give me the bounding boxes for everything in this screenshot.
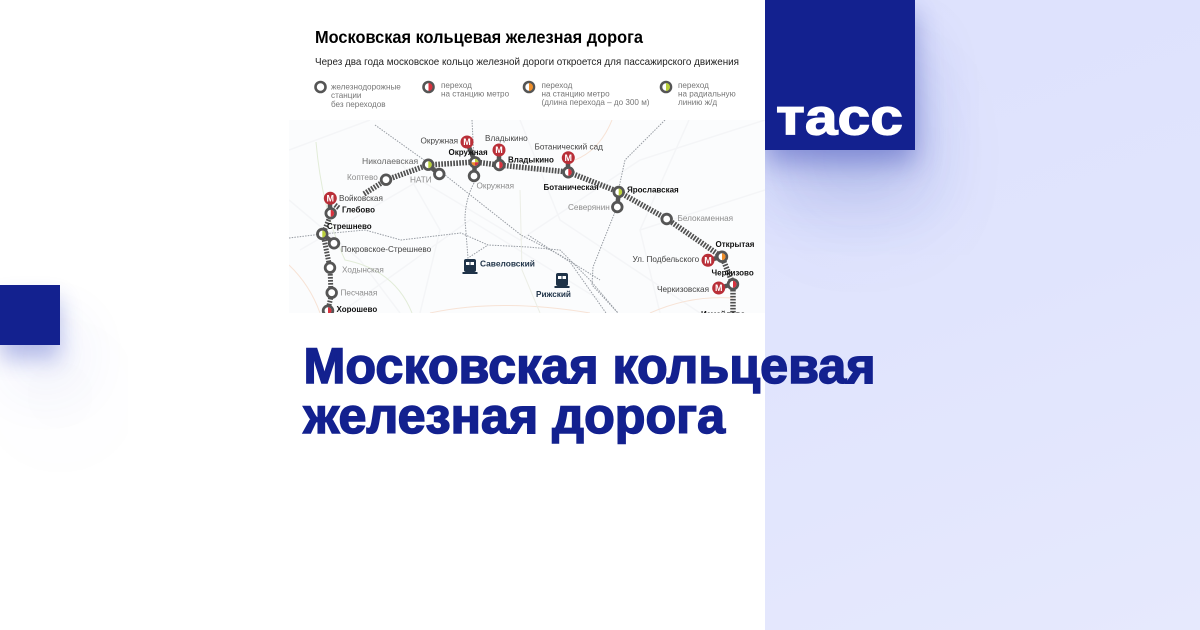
metro badges: М (495, 145, 503, 155)
station: Botanicheskaya (564, 168, 573, 177)
transfer connectors (322, 142, 733, 288)
plain station names: Песчаная (340, 288, 377, 298)
radial railways (289, 120, 665, 313)
transfer station names (bold): Открытая (716, 240, 755, 249)
transfer station names (bold): Окружная (448, 148, 488, 157)
decorative square with shadow (0, 285, 60, 345)
rail terminal: Savelovsky (462, 258, 535, 274)
plain stations (325, 169, 672, 298)
plain station names: Коптево (347, 173, 378, 182)
rail terminal: Savelovsky: Савеловский (480, 258, 535, 268)
metro station names: Черкизовская (657, 285, 709, 294)
transfer station names (bold): Ботаническая (544, 183, 599, 192)
station: Streshnevo (318, 229, 327, 239)
transfer station names (bold): Стрешнево (327, 222, 372, 231)
transfer station names (bold): Черкизово (712, 268, 754, 278)
legend item: metro transfer up to 300 m: (длина перехода – до 300 м) (542, 98, 650, 107)
rail terminal: Rizhsky (536, 273, 570, 297)
transfer station names (bold): Хорошево (336, 305, 377, 314)
station: Nikolaevskaya (424, 160, 433, 170)
metro station names: Ботанический сад (534, 142, 603, 152)
station: Otkrytaya (717, 252, 727, 262)
legend item: stations without transfers: без переходов (331, 100, 386, 109)
station: Vladykino (494, 160, 504, 170)
plain station names: Покровское-Стрешнево (341, 245, 432, 254)
legend item: metro transfer: на станцию метро (441, 90, 510, 98)
metro badges: М (715, 283, 722, 293)
transfer station names (bold): Ярославская (627, 186, 679, 194)
transfer station names (bold) (327, 148, 755, 319)
metro station names (339, 134, 709, 294)
metro station names: Войковская (339, 194, 383, 203)
legend item: metro transfer: переход (441, 81, 472, 90)
plain station names: Николаевская (362, 156, 419, 166)
infographic heading: Московская кольцевая железная дорога (315, 27, 643, 47)
station: Glebovo (326, 208, 336, 218)
legend item: radial rail transfer: на радиальную (678, 90, 736, 98)
main headline (302, 338, 876, 444)
legend item: stations without transfers: станции (331, 91, 361, 100)
metro badges: М (704, 256, 712, 266)
legend item: radial rail transfer: линию ж/д (678, 98, 717, 107)
plain station names: НАТИ (410, 176, 432, 184)
transfer station names (bold): Измайлово (701, 310, 745, 319)
infographic subtitle: Через два года московское кольцо железной дороги откроется для пассажирского движения (315, 56, 739, 68)
station: Cherkizovo (728, 280, 738, 289)
legend item: stations without transfers: железнодорожные (331, 82, 401, 92)
metro badges: М (327, 194, 334, 204)
metro badges (324, 136, 725, 294)
plain station names: Белокаменная (678, 214, 733, 223)
rail terminal: Rizhsky: Рижский (536, 290, 571, 299)
metro badges: М (565, 153, 572, 163)
plain station names (340, 156, 733, 298)
legend item: radial rail transfer: переход (678, 81, 709, 90)
main headline: железная дорога (304, 388, 725, 444)
legend item: radial rail transfer (661, 81, 736, 107)
plain station names: Ходынская (342, 266, 384, 274)
metro station names: Окружная (420, 136, 458, 146)
metro badges: М (463, 137, 471, 147)
plain station names: Окружная (476, 182, 514, 190)
metro station names: Владыкино (485, 134, 528, 143)
station: Yaroslavskaya (614, 187, 624, 197)
interchange stations (318, 158, 738, 316)
transfer station names (bold): Владыкино (508, 156, 554, 164)
background panel: right lavender (765, 0, 1200, 630)
ring railway line (364, 162, 733, 313)
legend item: metro transfer up to 300 m (524, 81, 650, 107)
main headline: Московская кольцевая (304, 338, 876, 394)
map (289, 120, 765, 319)
station: Khoroshevo (323, 306, 333, 316)
station: Okruzhnaya (470, 158, 480, 167)
legend item: metro transfer up to 300 m: на станцию метро (542, 90, 610, 98)
plain station names: Северянин (568, 203, 610, 212)
legend item: metro transfer up to 300 m: переход (542, 81, 573, 90)
metro station names: Ул. Подбельского (632, 255, 700, 264)
logo wordmark: тасс (776, 89, 903, 146)
legend item: stations without transfers (316, 82, 401, 109)
transfer station names (bold): Глебово (342, 206, 375, 214)
infographic: map excerpt (289, 31, 765, 313)
legend (316, 81, 736, 109)
TASS logo block (765, 0, 915, 150)
legend item: metro transfer (424, 81, 510, 98)
